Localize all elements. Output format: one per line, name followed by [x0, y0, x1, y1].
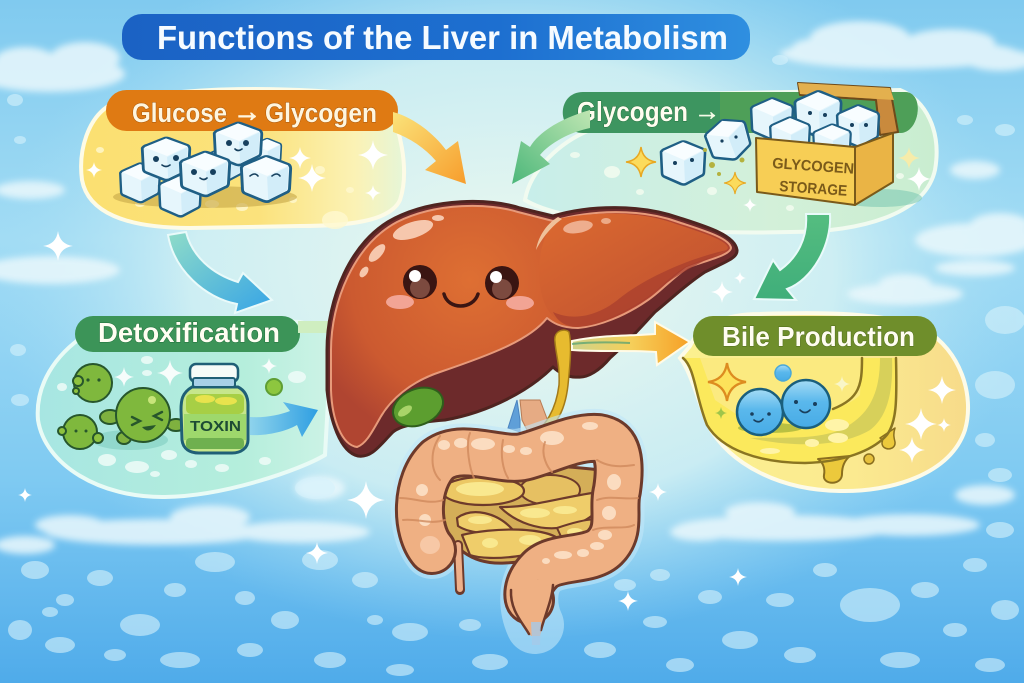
label: glycogen: → [694, 96, 720, 126]
sparkles [114, 358, 277, 387]
icon: toxin bottle: TOXIN [190, 418, 241, 435]
liver highlights [358, 215, 611, 279]
intestines [398, 422, 639, 645]
label: detoxification: Detoxification [98, 317, 280, 348]
panel: glucose to glycogen [81, 89, 404, 229]
icon: toxin germs [58, 364, 282, 450]
colon [398, 422, 639, 645]
falciform ridge [536, 217, 562, 250]
liver front surface [331, 206, 731, 447]
gallbladder [387, 381, 449, 433]
icon: sugar cubes [113, 123, 297, 216]
arrow: glucose panel to liver [393, 112, 466, 184]
panel speckles [57, 356, 306, 477]
halo [420, 438, 619, 625]
panel speckles [570, 152, 904, 211]
panel: detoxification [38, 316, 332, 497]
title banner: Functions of the Liver in Metabolism [157, 19, 728, 56]
arrow: liver to bile panel [572, 322, 690, 365]
arrow: toxin to liver [250, 402, 318, 437]
label: bile production: Bile Production [722, 321, 915, 352]
label: glycogen: Glycogen [577, 96, 688, 127]
panel: glycogen storage [525, 83, 937, 232]
appendix [458, 545, 460, 590]
label: glucose to glycogen: Glycogen [265, 98, 377, 128]
lobe shading [553, 250, 727, 327]
icon: toxin bottle [181, 364, 248, 453]
liver [327, 201, 737, 456]
arrow: glucose panel to detox [168, 232, 272, 313]
sparkles [708, 363, 956, 463]
arrow: glycogen panel to liver [512, 110, 590, 184]
connector: detox to liver [298, 321, 330, 333]
label: glucose to glycogen: Glucose [132, 98, 227, 128]
icon: falling glycogen cubes [661, 114, 754, 184]
liver face [386, 265, 534, 310]
label: glucose to glycogen: → [233, 96, 261, 127]
clouds [0, 21, 1024, 554]
label: glycogen [563, 92, 918, 133]
sparkles [626, 147, 931, 212]
colon haustra highlights [416, 422, 621, 564]
right lobe [539, 214, 728, 325]
arrow: storage to bile [754, 214, 830, 300]
label: bile production [693, 316, 937, 356]
sparkles [86, 140, 388, 201]
icon: glycogen storage box: GLYCOGEN [772, 155, 855, 178]
vessels and bile duct [508, 330, 571, 439]
icon: glycogen storage box: STORAGE [779, 178, 848, 200]
sparkles: open sky [18, 231, 747, 611]
icon: glycogen storage box [751, 83, 922, 207]
label: glucose to glycogen [106, 90, 398, 131]
bile stream [683, 358, 896, 483]
small intestine [441, 465, 607, 563]
panel: bile production [680, 313, 968, 491]
liver outer and underside [327, 201, 737, 456]
icon: bile bubbles [737, 365, 830, 435]
panel speckles [96, 147, 354, 229]
